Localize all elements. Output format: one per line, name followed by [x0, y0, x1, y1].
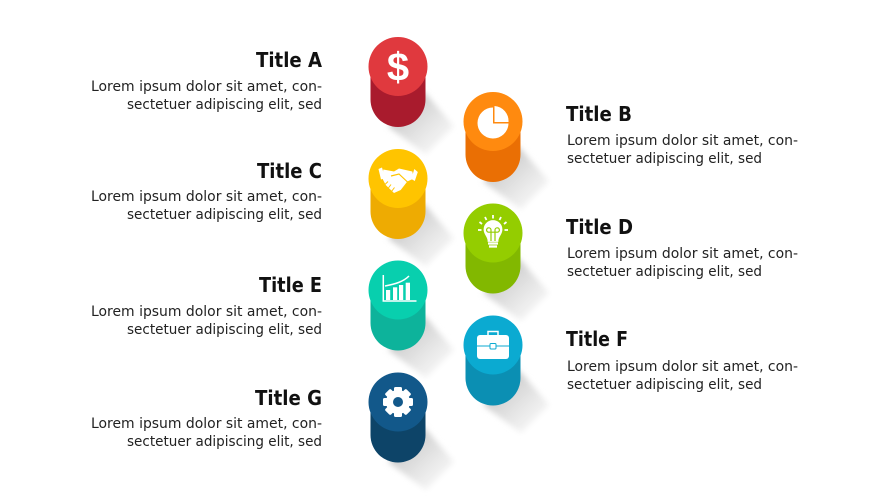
cylinder E: teal with bar chart icon: [368, 260, 454, 378]
text: Title D: sectetuer adipiscing elit, sed: [567, 264, 762, 280]
cylinder G: navy with gear icon: [368, 372, 454, 490]
text: Title C: Lorem ipsum dolor sit amet, con-: [91, 189, 322, 205]
text: Title F: Lorem ipsum dolor sit amet, con-: [567, 359, 798, 375]
text: Title C: [91, 159, 322, 223]
text: Title B: [566, 102, 798, 167]
icon: bar chart: [383, 275, 416, 301]
cylinder B: orange with pie chart icon: [464, 92, 549, 210]
icon: handshake: [378, 168, 418, 193]
icon: briefcase: [477, 332, 509, 359]
icon: dollar: $: [387, 46, 409, 90]
text: Title F: Title F: [566, 327, 628, 351]
text: Title D: Title D: [566, 215, 633, 239]
cylinder A: red with dollar icon: [368, 37, 454, 154]
text: Title G: Title G: [255, 386, 322, 410]
text: Title A: [91, 48, 322, 113]
cylinder C: yellow with handshake icon: [368, 149, 454, 266]
icon: light bulb: [478, 215, 508, 246]
text: Title F: [566, 327, 798, 393]
cylinder D: green with light bulb icon: [464, 204, 549, 321]
text: Title D: Lorem ipsum dolor sit amet, con-: [567, 246, 798, 262]
text: Title A: sectetuer adipiscing elit, sed: [127, 97, 322, 113]
text: Title E: Title E: [259, 273, 322, 297]
cylinder F: blue with briefcase icon: [464, 316, 549, 433]
text: Title B: Title B: [566, 102, 632, 126]
text: Title G: Lorem ipsum dolor sit amet, con-: [91, 416, 322, 432]
text: Title A: Title A: [256, 48, 322, 72]
text: Title A: Lorem ipsum dolor sit amet, con-: [91, 79, 322, 95]
text: Title B: sectetuer adipiscing elit, sed: [567, 151, 762, 167]
icon: gear: [383, 387, 413, 417]
text: Title E: Lorem ipsum dolor sit amet, con-: [91, 304, 322, 320]
icon: pie chart: [478, 106, 509, 138]
text: Title G: [91, 386, 322, 450]
text: Title E: sectetuer adipiscing elit, sed: [127, 322, 322, 338]
text: Title B: Lorem ipsum dolor sit amet, con-: [567, 133, 798, 149]
text: Title E: [91, 273, 322, 338]
text: Title D: [566, 215, 798, 280]
text: Title F: sectetuer adipiscing elit, sed: [567, 377, 762, 393]
text: Title G: sectetuer adipiscing elit, sed: [127, 434, 322, 450]
text: Title C: sectetuer adipiscing elit, sed: [127, 207, 322, 223]
text: Title C: Title C: [257, 159, 322, 183]
